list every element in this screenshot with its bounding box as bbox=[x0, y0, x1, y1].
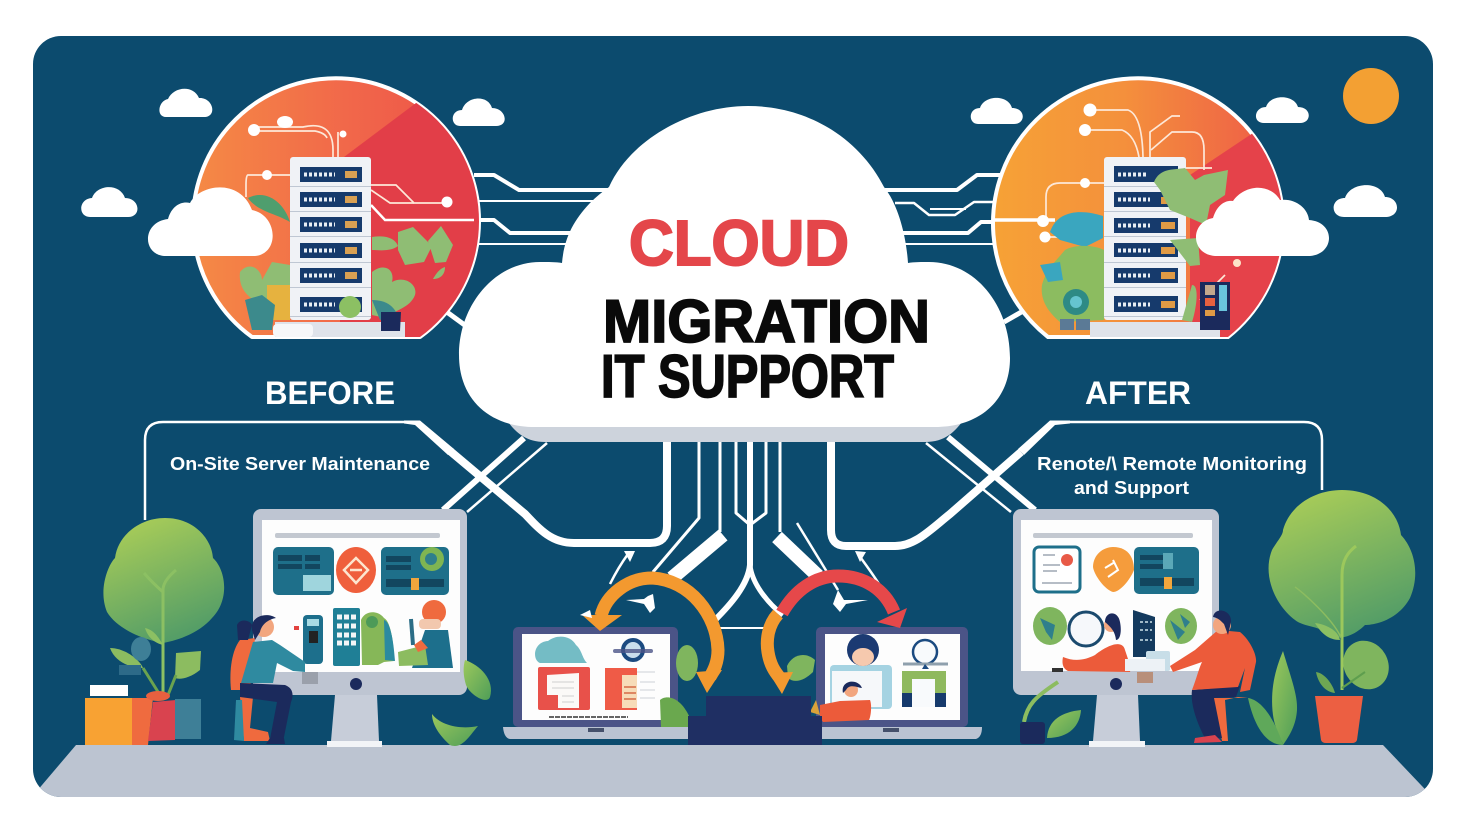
orange badge bbox=[336, 547, 376, 593]
side leaves bbox=[110, 648, 143, 668]
tree trunk and branches bbox=[144, 570, 176, 700]
label: BEFORE: BEFORE bbox=[265, 375, 395, 411]
front plants bbox=[339, 296, 361, 318]
header bar bbox=[1033, 533, 1193, 538]
stand bbox=[331, 695, 379, 741]
leaf by right laptop bbox=[787, 655, 815, 681]
dashboard card bbox=[1134, 547, 1199, 594]
large cloud: left circle bbox=[148, 187, 273, 256]
label: AFTER: AFTER bbox=[1085, 375, 1191, 411]
small cabinet bbox=[1200, 282, 1230, 330]
left illustration: server circle bbox=[193, 78, 500, 340]
cloud shadow bbox=[505, 418, 965, 442]
green card bbox=[902, 671, 946, 707]
main cloud bbox=[459, 106, 1010, 442]
red box bbox=[148, 700, 176, 741]
small plant by monitor bbox=[1020, 682, 1081, 744]
connector markers bbox=[624, 551, 868, 613]
circuit traces bbox=[246, 126, 474, 220]
helmet figure bbox=[398, 600, 453, 668]
red document 2 bbox=[605, 668, 655, 710]
curved arrow: left orange pair bbox=[580, 578, 722, 693]
title: IT SUPPORT: IT SUPPORT bbox=[601, 343, 894, 410]
headset avatar bbox=[830, 634, 892, 709]
magnifier circle bbox=[1069, 612, 1103, 646]
left foliage bbox=[1040, 212, 1104, 330]
header bar bbox=[275, 533, 440, 538]
orange box bbox=[85, 698, 132, 745]
pin icon bbox=[903, 640, 948, 669]
caption bar bbox=[549, 716, 628, 718]
cloud body bbox=[459, 106, 1010, 427]
left tree with boxes bbox=[85, 518, 224, 745]
dark phone bbox=[1133, 610, 1155, 657]
teal cloud bbox=[535, 637, 587, 663]
large cloud: right circle bbox=[1196, 188, 1329, 256]
circle background bbox=[993, 78, 1283, 337]
right monitor bbox=[1013, 509, 1219, 747]
floor bbox=[40, 745, 1425, 797]
laptop on desk bbox=[1125, 651, 1170, 671]
face bbox=[254, 617, 274, 637]
curved arrow: red bbox=[782, 576, 907, 628]
hair bbox=[252, 615, 276, 640]
legs bbox=[1192, 686, 1240, 738]
floor plant: tall leaves bbox=[1248, 651, 1297, 745]
green figure bbox=[361, 612, 394, 665]
text: remote monitoring and support: Renote/\ Remote Monitoring bbox=[1037, 454, 1307, 474]
circuit traces bbox=[993, 110, 1225, 300]
orange badge bbox=[1093, 547, 1134, 592]
pot rim bbox=[146, 691, 170, 701]
icon: sun bbox=[1343, 68, 1399, 124]
small leaf bbox=[1316, 672, 1335, 693]
tree canopy bbox=[103, 518, 224, 643]
title: CLOUD: CLOUD bbox=[629, 207, 849, 279]
connector lines: upper right bbox=[885, 175, 1030, 322]
chair bbox=[1213, 697, 1248, 741]
text: remote monitoring and support: and Support bbox=[1074, 478, 1189, 498]
right person bbox=[1170, 611, 1256, 743]
hair bbox=[1213, 611, 1231, 635]
screen bbox=[262, 520, 460, 672]
bezel bbox=[253, 509, 467, 695]
power button bbox=[350, 678, 362, 690]
seated person bbox=[810, 682, 871, 722]
circuit nodes bbox=[248, 116, 452, 208]
server rack bbox=[273, 157, 405, 337]
left laptop bbox=[503, 627, 700, 739]
darker red facet bbox=[1190, 134, 1282, 337]
leaf: left lower bbox=[464, 660, 491, 700]
circle background bbox=[193, 78, 479, 337]
left person bbox=[230, 615, 305, 744]
red document 1 bbox=[538, 667, 590, 710]
power button bbox=[1110, 678, 1122, 690]
orange back figure bbox=[230, 638, 255, 690]
head bbox=[1213, 616, 1231, 634]
leaves by left laptop bbox=[660, 645, 698, 727]
central dark base bbox=[688, 696, 822, 745]
small square bbox=[302, 672, 318, 684]
lens icon bbox=[613, 638, 653, 662]
document card bbox=[1034, 547, 1080, 592]
legs bbox=[240, 683, 293, 742]
dashboard card 2 bbox=[381, 547, 449, 595]
keypad device bbox=[333, 608, 360, 666]
curved arrow: right orange bbox=[767, 614, 793, 694]
teal torso and arm bbox=[241, 640, 305, 683]
screen bbox=[1021, 520, 1212, 671]
stand bbox=[1093, 695, 1140, 741]
title: MIGRATION: MIGRATION bbox=[603, 288, 930, 355]
left monitor bbox=[253, 509, 467, 747]
seated woman bbox=[1063, 613, 1131, 672]
white book bbox=[90, 685, 128, 696]
globe left bbox=[1033, 607, 1067, 645]
blue box bbox=[175, 699, 201, 739]
canopy bbox=[1269, 490, 1415, 638]
bezel bbox=[1013, 509, 1219, 695]
orange block behind leaves bbox=[267, 285, 290, 320]
pot bbox=[1315, 696, 1363, 743]
text: on-site server maintenance: On-Site Server Maintenance bbox=[170, 454, 430, 474]
right illustration: server circle bbox=[993, 78, 1300, 340]
globe right bbox=[1165, 608, 1197, 644]
phone device bbox=[294, 615, 323, 664]
trunk bbox=[1342, 546, 1356, 690]
server rack bbox=[1090, 157, 1220, 337]
torso and arms bbox=[1170, 630, 1256, 692]
darker red facet bbox=[340, 102, 479, 337]
right laptop bbox=[810, 627, 982, 739]
leaves bbox=[240, 195, 453, 318]
circuit nodes bbox=[1037, 104, 1241, 267]
text: remote monitoring and support bbox=[1037, 454, 1307, 498]
connector lines: lower network bbox=[145, 420, 1322, 628]
right foliage bbox=[1154, 168, 1228, 322]
chair bbox=[240, 697, 270, 741]
right tree in pot bbox=[1269, 490, 1415, 743]
leaf: left floor bbox=[432, 714, 478, 746]
connector lines: upper left bbox=[440, 175, 612, 326]
small tag bbox=[1137, 672, 1153, 683]
dashboard card 1 bbox=[273, 547, 334, 595]
small clouds bbox=[81, 89, 1397, 217]
round leaf bbox=[1334, 632, 1398, 698]
